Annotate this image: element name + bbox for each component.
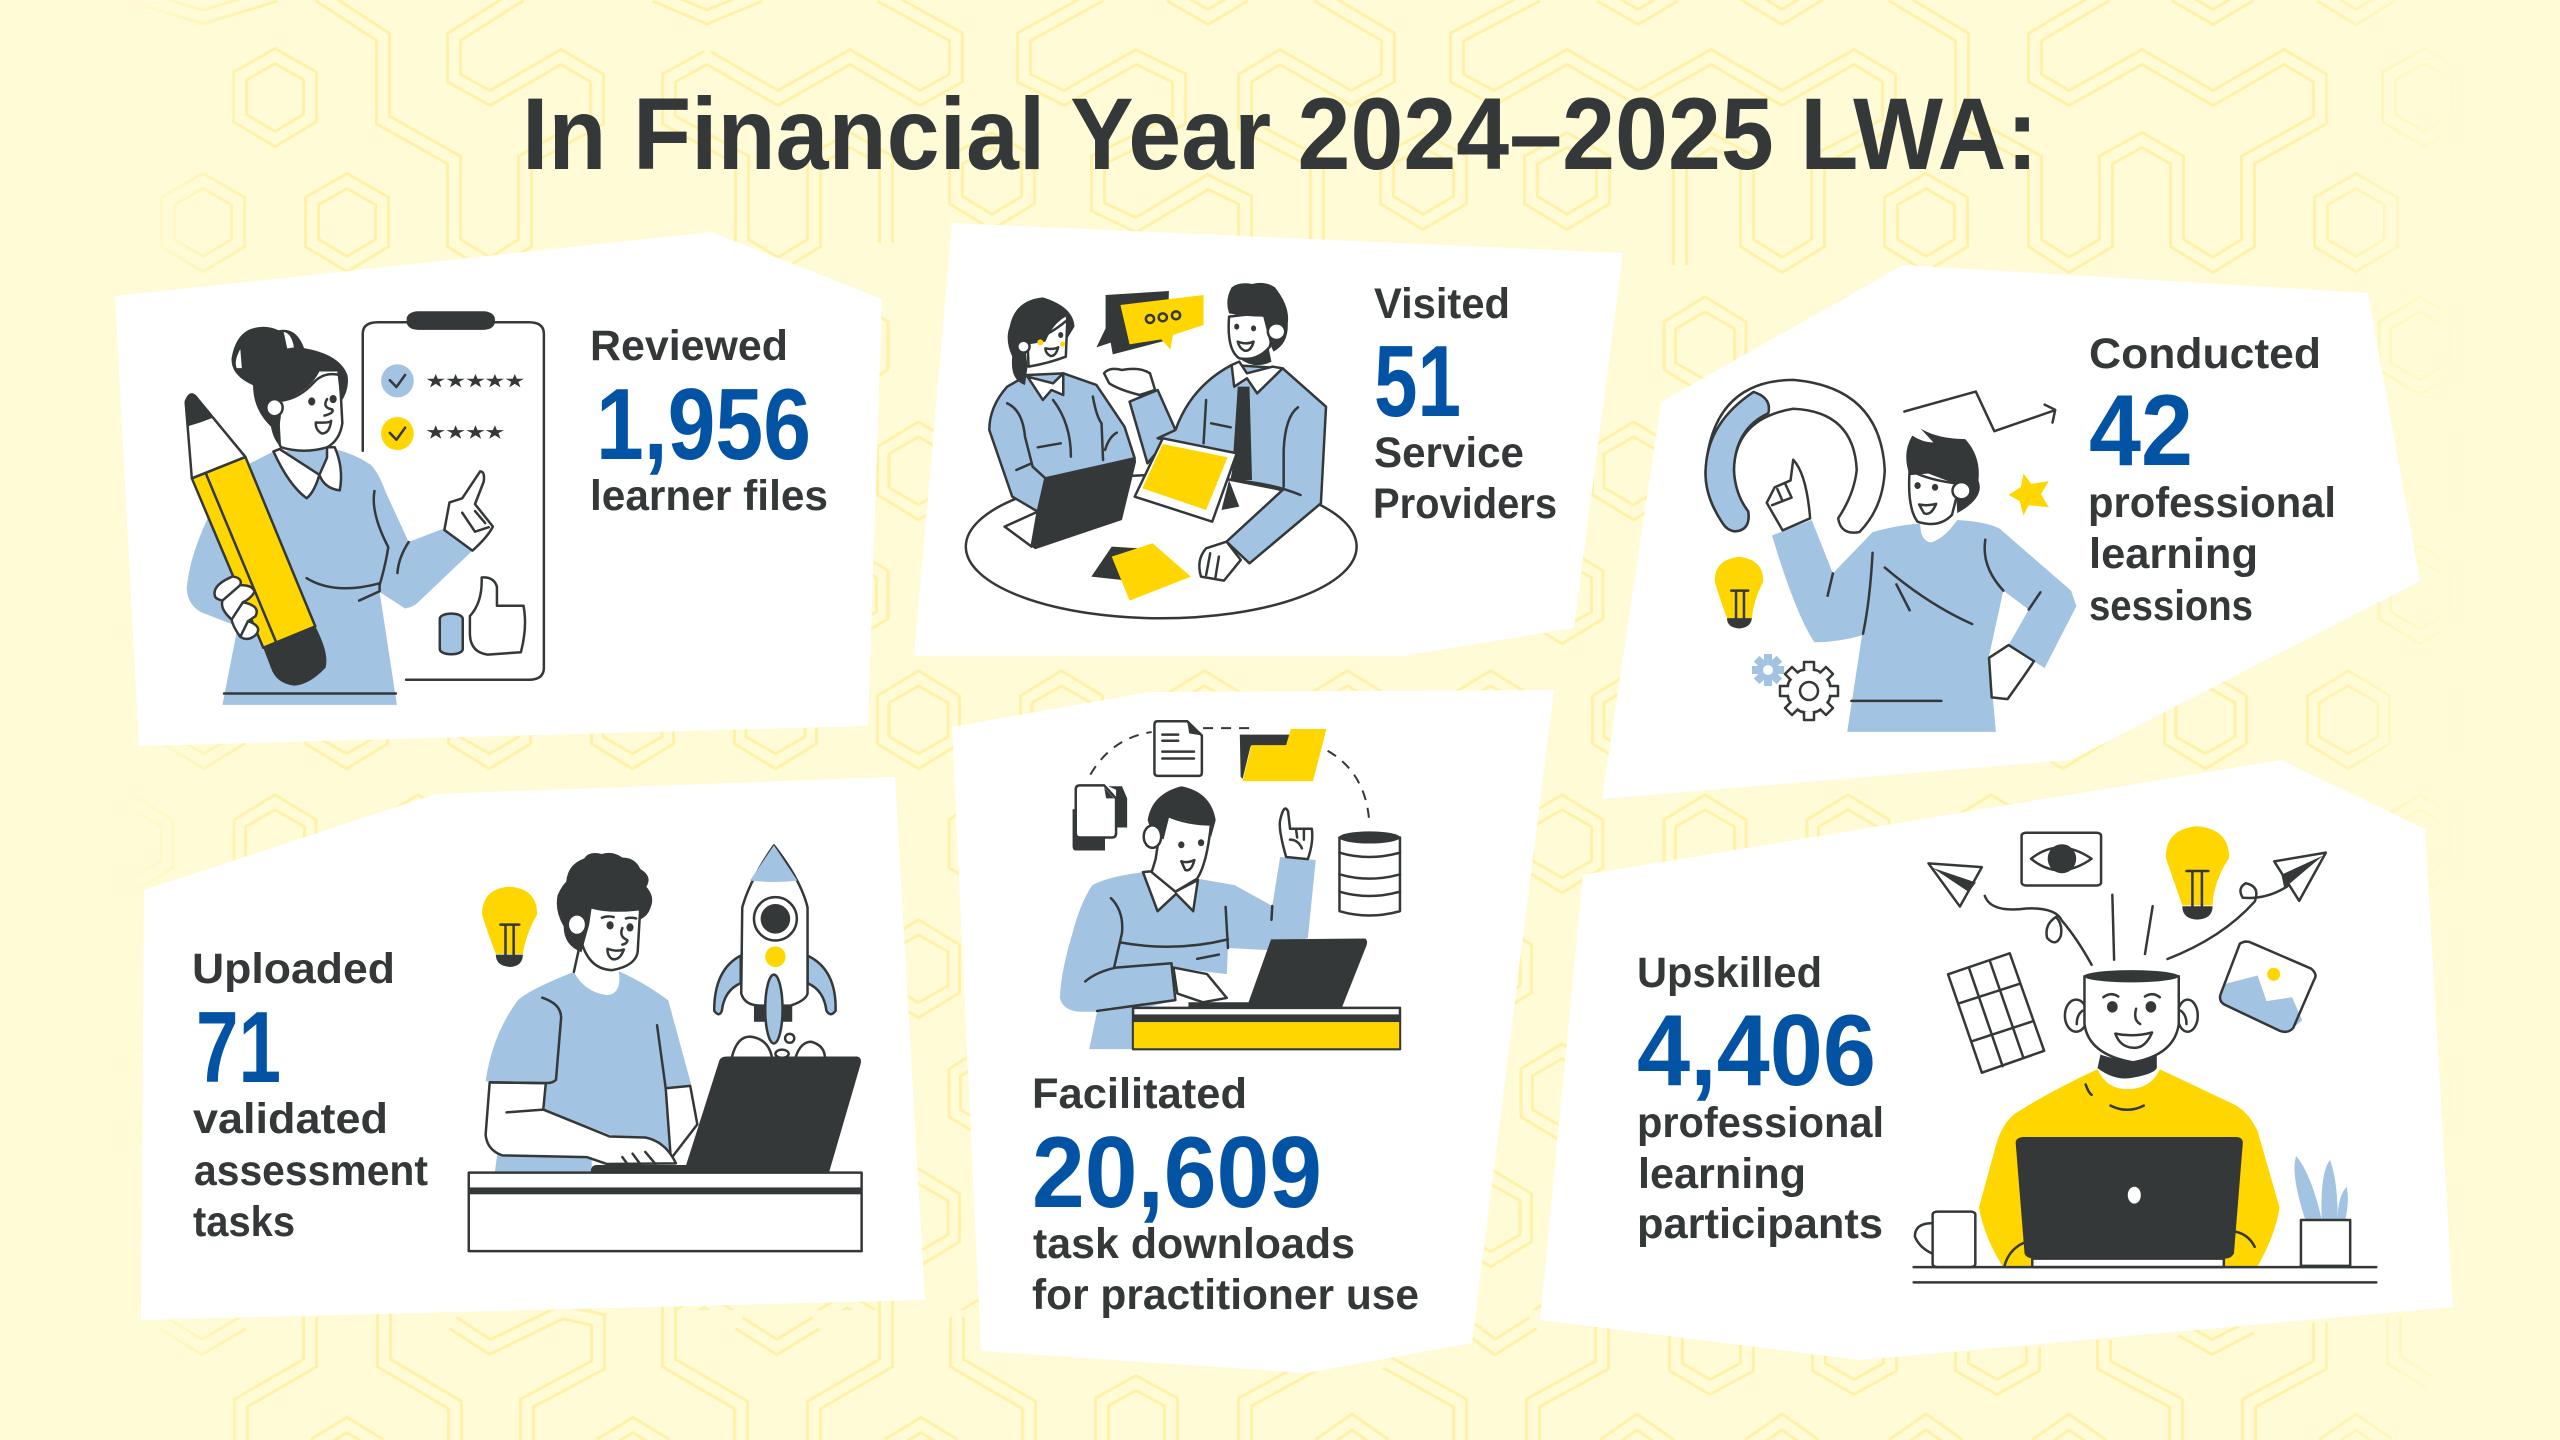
- dashed connector: [1090, 728, 1369, 820]
- desk: [469, 1173, 862, 1251]
- text: reviewed 1,956 learner files: [590, 322, 828, 520]
- text: visited 51 service providers: Providers: [1373, 480, 1557, 528]
- swirl lines: [1985, 883, 2287, 965]
- woman: [187, 327, 493, 705]
- text: uploaded 71 validated assessment tasks: validated: [193, 1095, 388, 1143]
- icon: gears: [1752, 654, 1838, 720]
- desk: [1133, 1008, 1400, 1049]
- icon: picture card: [2220, 942, 2316, 1032]
- panel background: [141, 777, 925, 1320]
- table: [966, 475, 1357, 618]
- arrow: rising trend: [1904, 392, 2055, 431]
- panel: facilitated task downloads: [952, 690, 1554, 1373]
- text: uploaded 71 validated assessment tasks: tasks: [193, 1198, 295, 1246]
- panel: visited service providers: [914, 223, 1623, 656]
- text: uploaded 71 validated assessment tasks: assessment: [194, 1147, 428, 1195]
- illustration: man at laptop with files and database: [1060, 721, 1400, 1049]
- panel background: [952, 690, 1554, 1373]
- gauge arc: [1706, 380, 1885, 533]
- panel background: [914, 223, 1623, 656]
- text: upskilled 4,406 professional learning participants: Upskilled: [1637, 949, 1822, 997]
- text: facilitated 20,609 task downloads: [1032, 1070, 1419, 1319]
- illustration: man pointing at gauge: [1706, 380, 2076, 732]
- desk lines: [1914, 1267, 2376, 1282]
- text: conducted 42 professional learning sessions: 42: [2089, 375, 2193, 487]
- text: uploaded 71 validated assessment tasks: 71: [196, 992, 281, 1104]
- text: upskilled 4,406 professional learning participants: learning: [1638, 1150, 1806, 1198]
- man: [1767, 429, 2076, 732]
- panel: uploaded validated assessment tasks: [141, 777, 925, 1320]
- text: visited 51 service providers: Visited: [1374, 280, 1510, 328]
- icon: stacked files: [1073, 785, 1127, 850]
- icon: thumbs up: [440, 577, 525, 655]
- icon: folder: [1240, 729, 1326, 781]
- text: conducted 42 professional learning sessions: [2088, 330, 2336, 630]
- panel: conducted professional learning sessions: [1602, 265, 2420, 799]
- text: facilitated 20,609 task downloads: 20,609: [1032, 1117, 1322, 1229]
- speech bubbles: [1096, 291, 1204, 354]
- illustration: woman with giant pencil and checklist: [185, 311, 544, 705]
- text: upskilled 4,406 professional learning participants: professional: [1637, 1099, 1884, 1147]
- illustration: person with open mind at laptop: [1914, 826, 2376, 1282]
- illustration: person launching rocket from laptop: [469, 845, 862, 1251]
- woman colleague: [989, 297, 1135, 512]
- man: [1060, 786, 1316, 1049]
- rocket: [714, 845, 836, 1058]
- laptop: [1188, 939, 1367, 1009]
- panel background: [1540, 760, 2453, 1360]
- person: [1979, 970, 2280, 1266]
- icon: light bulb: [1715, 557, 1763, 629]
- text: visited 51 service providers: 51: [1374, 326, 1461, 438]
- text: reviewed 1,956 learner files: learner files: [590, 472, 828, 520]
- panel background: [1602, 265, 2420, 799]
- laptop: [2004, 1137, 2255, 1267]
- icon: eye card: [2022, 833, 2101, 886]
- panel background: [115, 232, 882, 746]
- text: conducted 42 professional learning sessions: professional: [2088, 479, 2336, 527]
- person: [486, 853, 697, 1173]
- text: facilitated 20,609 task downloads: for practitioner use: [1032, 1271, 1419, 1319]
- text: reviewed 1,956 learner files: 1,956: [596, 369, 811, 481]
- man colleague: [1104, 283, 1326, 581]
- text: visited 51 service providers: [1373, 280, 1557, 528]
- icon: paper planes: [1928, 853, 2326, 907]
- text: visited 51 service providers: Service: [1374, 429, 1524, 477]
- icon: light bulb: [2166, 826, 2229, 920]
- text: uploaded 71 validated assessment tasks: Uploaded: [192, 945, 395, 993]
- text: upskilled 4,406 professional learning participants: participants: [1637, 1200, 1883, 1248]
- text: uploaded 71 validated assessment tasks: [192, 945, 428, 1246]
- title: In Financial Year 2024–2025 LWA:: [522, 77, 2038, 191]
- mug: [1915, 1212, 1975, 1267]
- laptop: [591, 1057, 861, 1173]
- icon: star: [2009, 474, 2049, 516]
- text: facilitated 20,609 task downloads: Facilitated: [1032, 1070, 1247, 1118]
- text: facilitated 20,609 task downloads: task downloads: [1033, 1220, 1355, 1268]
- icon: light bulb: [482, 887, 537, 967]
- paper on table: [1091, 543, 1191, 601]
- text: conducted 42 professional learning sessions: sessions: [2089, 582, 2253, 630]
- text: reviewed 1,956 learner files: Reviewed: [590, 322, 788, 370]
- text: upskilled 4,406 professional learning participants: [1637, 949, 1884, 1248]
- text: conducted 42 professional learning sessions: Conducted: [2089, 330, 2321, 378]
- clipboard: [363, 311, 544, 680]
- icon: grid: [1948, 953, 2044, 1073]
- icon: document: [1154, 721, 1202, 776]
- icon: database: [1339, 831, 1400, 916]
- panel: reviewed learner files: [115, 232, 882, 746]
- panel: upskilled professional learning participants: [1540, 760, 2453, 1360]
- giant pencil: [185, 394, 326, 686]
- text: conducted 42 professional learning sessions: learning: [2089, 530, 2258, 578]
- plant: [2295, 1156, 2350, 1266]
- illustration: two colleagues meeting at a table: [966, 283, 1357, 618]
- text: upskilled 4,406 professional learning participants: 4,406: [1637, 995, 1876, 1107]
- laptop: [1005, 458, 1136, 549]
- tablet: [1135, 438, 1239, 522]
